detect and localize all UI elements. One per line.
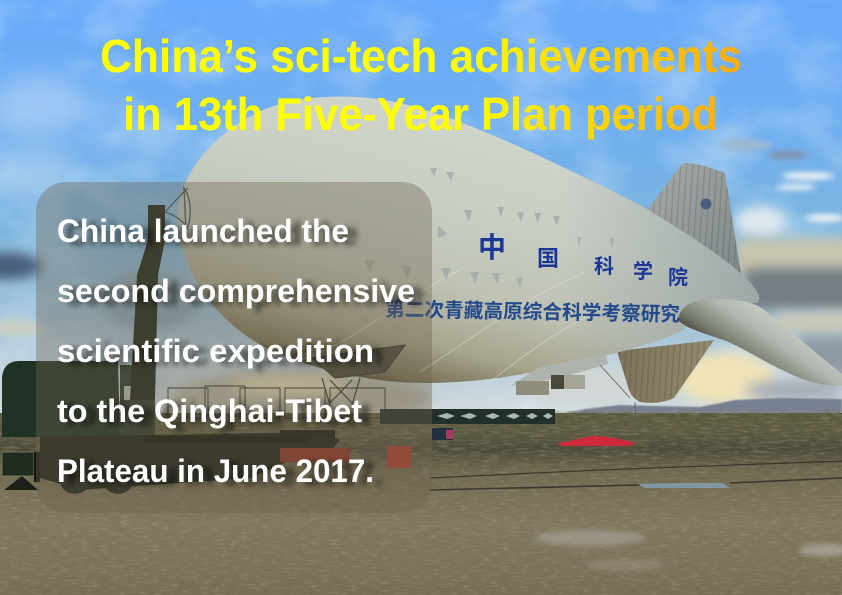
hull lettering: Chinese Academy of Sciences: 科 — [594, 255, 614, 278]
mast — [130, 205, 165, 400]
distant mountains — [555, 398, 842, 416]
panel text: China launched the — [57, 213, 349, 249]
sky background — [0, 0, 842, 424]
panel text: to the Qinghai-Tibet — [57, 393, 362, 429]
title — [100, 30, 742, 140]
storm clouds right — [530, 238, 842, 404]
hull lettering: Chinese Academy of Sciences: 院 — [668, 265, 688, 289]
panel text: scientific expedition — [57, 333, 374, 369]
railings — [168, 386, 385, 418]
hull patches — [364, 168, 614, 288]
mooring trusses — [312, 345, 405, 405]
mobile mast vehicle — [2, 188, 411, 494]
equipment rack — [2, 452, 34, 476]
panel text: second comprehensive — [57, 273, 415, 309]
translucent text panel — [36, 182, 432, 513]
dark girder platform — [380, 409, 555, 440]
hull lettering: Chinese Academy of Sciences: 中 — [478, 232, 506, 263]
top tail fin — [645, 163, 741, 274]
panel text: Plateau in June 2017. — [57, 453, 374, 489]
panel text — [57, 213, 415, 489]
storm clouds left — [0, 252, 430, 424]
container — [2, 361, 120, 437]
red tarp — [558, 436, 636, 446]
hull — [178, 97, 759, 383]
bottom tail fin — [617, 340, 714, 403]
title: China’s sci-tech achievements — [100, 30, 742, 82]
gondola — [510, 354, 608, 395]
hull lettering: Chinese Academy of Sciences — [478, 232, 688, 289]
blue ground panels — [638, 483, 730, 488]
ground — [0, 413, 842, 595]
hull lettering: Chinese Academy of Sciences: 国 — [537, 246, 559, 271]
rigging lines — [300, 270, 590, 382]
hull lettering: expedition name: 第二次青藏高原综合科学考察研究 — [385, 297, 680, 326]
title: in 13th Five-Year Plan period — [123, 88, 718, 140]
right tail fin — [678, 299, 842, 386]
truck bed — [40, 432, 340, 490]
hull lettering: Chinese Academy of Sciences: 学 — [633, 260, 653, 283]
airship — [178, 97, 842, 430]
